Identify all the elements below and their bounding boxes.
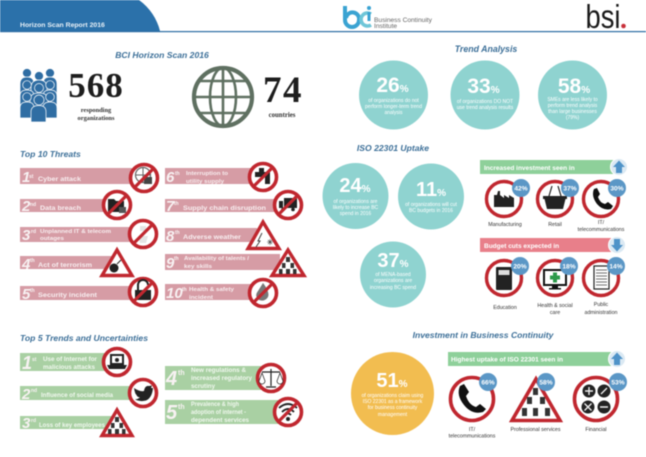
threat 3: unplanned IT and telecom outages: 3 [22, 227, 31, 244]
circle: 58%: 58% [558, 75, 590, 98]
threat 4: act of terrorism: th [30, 258, 35, 264]
threat 3: unplanned IT and telecom outages: Unplanned IT & telecom [40, 229, 111, 235]
circle: 58%: (79%) [566, 115, 580, 121]
trend 4: new regulations and increased regulatory scrutiny: New regulations & [191, 368, 247, 374]
item: Manufacturing 42% [486, 179, 530, 228]
circle: 58%: SMEs are less likely to [547, 97, 598, 103]
circle: 33% [450, 60, 520, 130]
item: IT / telecommunications 66%: telecommunications [449, 434, 496, 440]
circle: 24%: likely to increase BC [333, 205, 379, 211]
threat 1: cyber attack: st [29, 174, 34, 180]
panel: Top 10 Threats [20, 149, 304, 306]
label: countries: countries [269, 112, 296, 119]
threat 7: supply chain disruption: 7 [166, 198, 175, 215]
threat 6: interruption to utility supply: Interruption to [186, 171, 228, 177]
panel: BCI Horizon Scan [20, 50, 303, 126]
icon: globe [194, 68, 252, 126]
label: responding organizations: organizations [78, 115, 115, 122]
circle: 33%: use trend analysis results [457, 105, 514, 111]
stat: 568: 568 [68, 66, 124, 105]
item: Financial 53% [574, 373, 627, 433]
threat 5: security incident [20, 278, 156, 306]
threat 2: data breach: nd [30, 202, 36, 208]
threat 6: interruption to utility supply: 6 [166, 169, 175, 186]
item: IT / telecommunications 30%: telecommunications [578, 227, 625, 233]
item: IT / telecommunications 66% [449, 373, 497, 440]
threat 7: supply chain disruption: Supply chain disruption [183, 205, 266, 212]
item: Manufacturing 42%: 42% [514, 185, 528, 192]
trend 5: prevalence and high adoption of internet-dependent services: Prevalence & high [191, 402, 239, 408]
trend 2: influence of social media: Influence of social media [41, 393, 114, 399]
item: Health and social care 18%: 18% [562, 263, 576, 270]
circle: 26% [359, 60, 428, 130]
trend 1: use of internet for malicious attacks: malicious attacks [43, 365, 96, 371]
circle: 37% [360, 242, 426, 308]
heading: Investment in Business Continuity: Investment in Business Continuity [413, 330, 555, 340]
circle: 51%: ISO 22301 as a framework [363, 399, 423, 405]
trend 3: loss of key employees: 3 [22, 415, 31, 432]
item: Public administration 14%: Public [594, 302, 609, 308]
trend 2: influence of social media: 2 [21, 386, 31, 403]
threat 4: act of terrorism: 4 [21, 256, 31, 273]
banner: Budget cuts expected in: Budget cuts expected in [484, 243, 559, 250]
threat 9: availability of talents / key skills: th [174, 256, 179, 262]
threat 6: interruption to utility supply: utility supply [186, 179, 225, 185]
trend 5: prevalence and high adoption of internet-dependent services: dependent services [191, 418, 250, 424]
trend 4: new regulations and increased regulatory scrutiny [165, 364, 284, 392]
trend 4: new regulations and increased regulatory scrutiny: 4 [165, 368, 177, 390]
heading: Trend Analysis: Trend Analysis [455, 44, 517, 54]
banner: Highest uptake of ISO 22301 seen in: Highest uptake of ISO 22301 seen in [451, 356, 563, 364]
circle: 37%: increasing BC spend [370, 285, 416, 291]
threat 2: data breach: Data breach [40, 205, 81, 212]
logo: Business Continuity Institute: Institute [374, 23, 397, 30]
banner: Increased investment seen in: Increased investment seen in [484, 165, 575, 172]
circle: 11%: of organizations will cut [405, 202, 457, 208]
threat 2: data breach [20, 192, 130, 218]
header band: Horizon Scan Report 2016 [20, 22, 105, 29]
item: Financial 53%: Financial [585, 427, 607, 433]
heading: BCI Horizon Scan 2016: BCI Horizon Scan 2016 [115, 50, 209, 60]
item: Health and social care 18%: Health & social [537, 303, 573, 309]
trend 4: new regulations and increased regulatory scrutiny: increased regulatory [191, 376, 253, 382]
circle: 26%: analysis [384, 110, 403, 116]
circle: 51%: for business continuity [368, 405, 418, 411]
item: Retail 37%: 37% [563, 185, 577, 192]
item: Retail 37%: Retail [548, 222, 562, 228]
threat 10: health and safety incident: Health & safety [189, 287, 235, 293]
circle: 24%: spend in 2016 [340, 211, 371, 217]
circle: 37%: of MENA-based [375, 272, 411, 278]
trend 5: prevalence and high adoption of internet-dependent services: adoption of internet - [191, 410, 246, 416]
panel: Investment in Business Continuity [351, 330, 627, 440]
item: IT / telecommunications 66%: IT/ [469, 427, 476, 433]
circle: 58%: than large businesses [548, 109, 597, 115]
threat 5: security incident: Security incident [38, 292, 98, 299]
panel: Top 5 Trends and Uncertainties [20, 333, 302, 436]
circle: 37%: organizations are [374, 278, 412, 284]
threat 6: interruption to utility supply [165, 164, 276, 190]
circle: 51%: management [378, 412, 408, 418]
threat 10: health and safety incident: 10 [166, 285, 183, 302]
item: Public administration 14% [584, 257, 625, 316]
circle: 11%: BC budgets in 2016 [409, 208, 453, 214]
circle: 33%: 33% [467, 75, 500, 98]
circle: 11% [398, 164, 464, 230]
item: Professional services 58% [510, 373, 561, 433]
threat 9: availability of talents / key skills: Availability of talents / [184, 256, 249, 262]
item: IT / telecommunications 30%: 30% [610, 185, 624, 192]
item: Professional services 58%: Professional services [510, 427, 561, 433]
trend 3: loss of key employees [20, 410, 132, 436]
circle: 11%: 11% [416, 179, 446, 201]
label: responding organizations: responding [81, 107, 112, 114]
trend 4: new regulations and increased regulatory scrutiny: th [178, 370, 185, 377]
logo: Business Continuity Institute: Business Continuity [374, 17, 433, 24]
threat 7: supply chain disruption [165, 192, 302, 218]
threat 6: interruption to utility supply: th [175, 171, 180, 177]
panel: ISO 22301 Uptake [322, 143, 464, 308]
circle: 24% [322, 163, 388, 229]
banner: Highest uptake of ISO 22301 seen in [448, 350, 626, 368]
circle: 26%: of organizations do not [368, 98, 419, 104]
circle: 24%: of organizations are [334, 199, 378, 205]
threat 10: health and safety incident: th [182, 287, 187, 293]
item: Financial 53%: 53% [611, 379, 625, 386]
threat 5: security incident: 5 [22, 286, 31, 303]
heading: Top 10 Threats: Top 10 Threats [20, 149, 81, 159]
trend 5: prevalence and high adoption of internet-dependent services: th [178, 404, 185, 411]
trend 5: prevalence and high adoption of internet-dependent services [165, 398, 302, 426]
circle: 51%: of organizations claim using [362, 393, 424, 399]
threat 1: cyber attack: 1 [22, 169, 30, 186]
circle: 26%: 26% [376, 74, 409, 97]
item: IT / telecommunications 30% [578, 179, 626, 233]
icon: group of people [20, 68, 57, 122]
threat 7: supply chain disruption: th [174, 201, 179, 207]
threat 1: cyber attack: Cyber attack [38, 176, 81, 183]
trend 1: use of internet for malicious attacks: st [32, 357, 37, 363]
trend 4: new regulations and increased regulatory scrutiny: scrutiny [191, 384, 216, 390]
threat 8: adverse weather: th [175, 230, 180, 236]
panel: Trend Analysis [359, 44, 607, 130]
circle: 58% [538, 60, 607, 130]
trend 2: influence of social media: nd [31, 388, 37, 394]
item: IT / telecommunications 30%: IT/ [598, 220, 605, 226]
threat 9: availability of talents / key skills: key skills [184, 264, 212, 270]
threat 3: unplanned IT and telecom outages [20, 220, 156, 248]
heading: Top 5 Trends and Uncertainties: Top 5 Trends and Uncertainties [20, 333, 148, 343]
threat 3: unplanned IT and telecom outages: rd [31, 229, 36, 235]
threat 5: security incident: th [30, 288, 35, 294]
circle: 58%: perform trend analysis [548, 103, 598, 109]
circle: 33%: of organizations DO NOT [457, 99, 513, 105]
trend 5: prevalence and high adoption of internet-dependent services: 5 [166, 402, 178, 424]
threat 1: cyber attack [20, 164, 158, 192]
trend 1: use of internet for malicious attacks: 1 [22, 353, 32, 373]
circle: 37%: 37% [377, 250, 409, 272]
logo: Business Continuity Institute [345, 6, 433, 30]
threat 10: health and safety incident: incident [189, 295, 213, 301]
threat 9: availability of talents / key skills [165, 250, 304, 276]
banner: Budget cuts expected in [480, 236, 626, 254]
banner: Increased investment seen in [480, 158, 628, 176]
stat: 74: 74 [263, 70, 303, 111]
threat 8: adverse weather [165, 222, 279, 248]
circle: 24%: 24% [339, 175, 371, 197]
item: Public administration 14%: administration [585, 310, 618, 316]
trend 1: use of internet for malicious attacks [20, 348, 130, 376]
item: Education 20% [486, 257, 529, 311]
item: Health and social care 18% [537, 257, 578, 316]
threat 2: data breach: 2 [21, 198, 31, 215]
threat 4: act of terrorism [20, 250, 132, 276]
header band [0, 0, 646, 32]
trend 2: influence of social media [20, 380, 156, 406]
circle: 51%: 51% [376, 370, 408, 392]
circle: 51% [351, 352, 434, 435]
item: Health and social care 18%: care [550, 310, 560, 316]
threat 4: act of terrorism: Act of terrorism [38, 262, 92, 269]
item: Manufacturing 42%: Manufacturing [488, 222, 522, 228]
panel: Increased investment [480, 158, 628, 233]
label: responding organizations [78, 107, 115, 122]
threat 3: unplanned IT and telecom outages: outages [40, 236, 64, 242]
threat 8: adverse weather: 8 [166, 228, 175, 245]
threat 10: health and safety incident [165, 280, 276, 306]
item: Education 20%: Education [493, 305, 517, 311]
item: IT / telecommunications 66%: 66% [481, 379, 495, 386]
item: Professional services 58%: 58% [539, 379, 553, 386]
item: Retail 37% [538, 179, 579, 228]
item: Education 20%: 20% [513, 263, 527, 270]
threat 8: adverse weather: Adverse weather [183, 234, 241, 241]
heading: ISO 22301 Uptake: ISO 22301 Uptake [357, 143, 429, 153]
threat 9: availability of talents / key skills: 9 [166, 255, 175, 272]
trend 3: loss of key employees: Loss of key employees [39, 423, 106, 429]
trend 3: loss of key employees: rd [31, 418, 36, 424]
item: Public administration 14%: 14% [609, 263, 623, 270]
circle: 26%: perform longer-term trend [365, 104, 422, 110]
trend 1: use of internet for malicious attacks: Use of Internet for [43, 357, 98, 363]
panel: Budget cuts [480, 236, 626, 316]
